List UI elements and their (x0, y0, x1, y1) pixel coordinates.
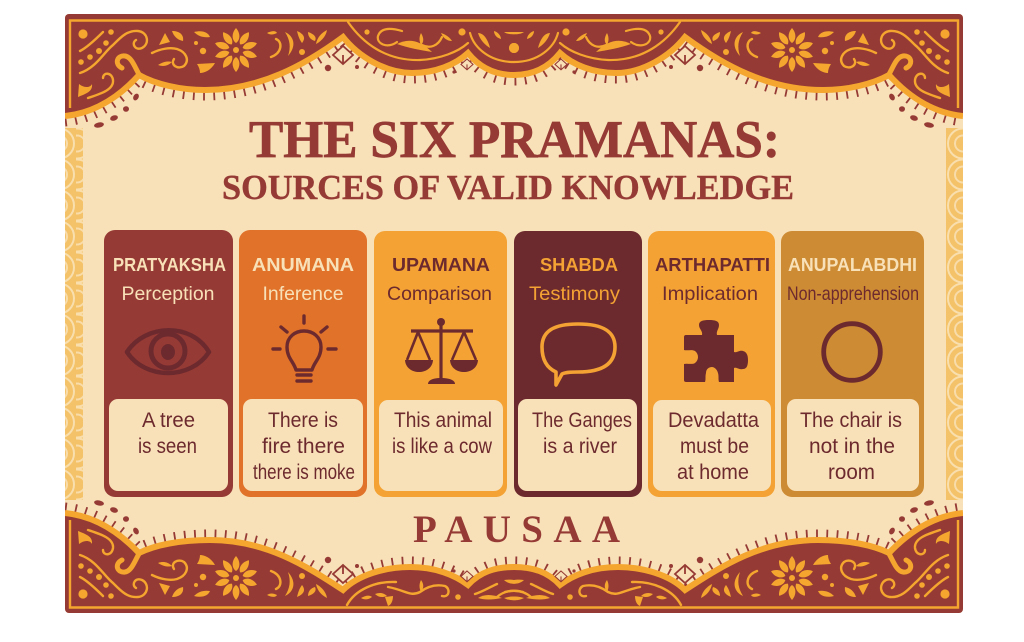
card: Pratyaksha (104, 230, 233, 497)
example box (787, 399, 919, 491)
heading: Anupalabdhi: ANUPALABDHI (788, 255, 917, 275)
label: Perception: Perception (122, 283, 214, 305)
top decorative border (65, 14, 963, 129)
example box: is seen (138, 435, 197, 458)
example box (518, 399, 637, 491)
label: Implication: Implication (662, 283, 758, 305)
card: Anupalabdhi (781, 231, 924, 497)
right side pattern (946, 128, 963, 500)
icon: light bulb (273, 316, 336, 381)
icon: speech bubble (542, 324, 615, 385)
heading: Anumana: ANUMANA (252, 255, 354, 275)
card: Anumana (239, 230, 367, 497)
footer brand: PAUSAA (413, 508, 620, 551)
icon: puzzle piece (684, 320, 748, 382)
icon: empty circle (824, 324, 880, 380)
example box: Devadatta (668, 409, 759, 432)
label: Testimony: Testimony (529, 283, 620, 305)
subtitle: SOURCES OF VALID KNOWLEDGE (222, 168, 794, 207)
heading: Shabda: SHABDA (540, 255, 618, 275)
heading: Arthapatti: ARTHAPATTI (655, 255, 770, 275)
bottom decorative border (65, 499, 963, 613)
title: THE SIX PRAMANAS: (249, 111, 780, 169)
example box: There is (268, 409, 338, 432)
icon: eye (127, 330, 209, 373)
card: Arthapatti (648, 231, 775, 497)
label: Comparison: Comparison (387, 283, 492, 305)
example box: is like a cow (392, 435, 493, 458)
heading: Upamana: UPAMANA (392, 255, 490, 275)
label: Non-apprehension: Non-apprehension (787, 283, 919, 305)
example box (379, 400, 503, 491)
icon: balance scale (405, 318, 478, 384)
example box: not in the (809, 435, 895, 458)
example box: there is moke (253, 461, 355, 484)
example box: The chair is (800, 409, 902, 432)
example box: at home (677, 461, 749, 484)
example box (109, 399, 228, 491)
example box: must be (680, 435, 749, 458)
example box: fire there (262, 435, 345, 458)
card: Upamana (374, 231, 507, 497)
example box: The Ganges (532, 409, 632, 432)
example box (243, 399, 363, 491)
label: Inference: Inference (262, 283, 344, 305)
example box (653, 400, 771, 491)
left side pattern (65, 128, 83, 500)
example box: is a river (543, 435, 617, 458)
example box: A tree (142, 409, 195, 432)
example box: This animal (394, 409, 492, 432)
example box: room (828, 461, 875, 484)
card: Shabda (514, 231, 642, 497)
heading: Pratyaksha: PRATYAKSHA (113, 255, 226, 275)
